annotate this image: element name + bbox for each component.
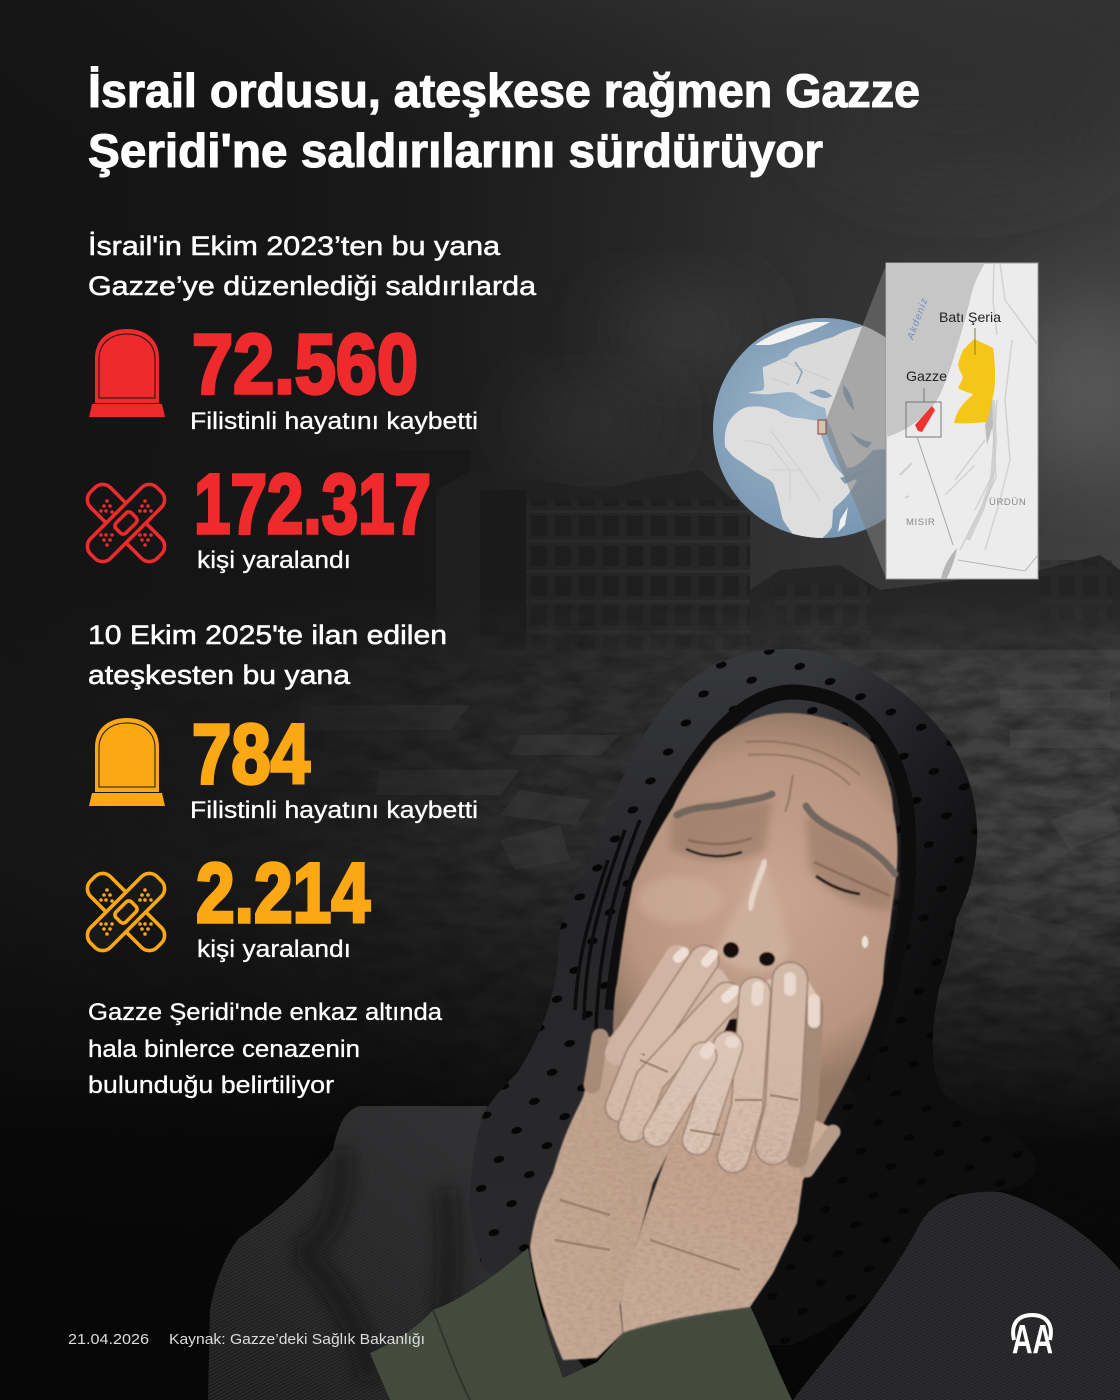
brow right xyxy=(806,806,895,874)
green sleeve xyxy=(370,1248,792,1400)
icon: red bandage xyxy=(83,480,169,566)
note: bodies under rubble: hala binlerce cenazenin xyxy=(88,1036,360,1063)
icon: orange bandage xyxy=(83,869,169,955)
footer: date and source xyxy=(68,1331,425,1348)
note: bodies under rubble xyxy=(88,999,443,1099)
hand wrinkle texture xyxy=(532,1053,802,1360)
stat: 172.317 injured xyxy=(194,457,431,574)
nose xyxy=(716,858,790,971)
section heading: since October 2023: Gazze’ye düzenlediği saldırılarda xyxy=(88,271,537,301)
label: Akdeniz: Akdeniz xyxy=(905,296,931,342)
section heading: since ceasefire xyxy=(88,620,447,690)
stat: 2.214 injured: 2.214 xyxy=(196,846,370,940)
sweater left xyxy=(208,1106,610,1400)
label: Gazze: Gazze xyxy=(906,368,947,384)
photo: grieving woman in a dotted black headscarf xyxy=(208,649,1120,1400)
title: İsrail ordusu, ateşkese rağmen Gazze xyxy=(88,64,920,117)
brow left xyxy=(677,794,772,815)
headscarf xyxy=(470,649,1036,1345)
stat: 172.317 injured: kişi yaralandı xyxy=(197,547,351,574)
map inset: globe with Gaza location xyxy=(713,263,1038,580)
label: Ürdün: ÜRDÜN xyxy=(989,497,1026,508)
note: bodies under rubble: Gazze Şeridi'nde enkaz altında xyxy=(88,999,443,1026)
under-brow shadows xyxy=(670,800,772,861)
marker on globe xyxy=(818,420,826,434)
stat: 172.317 injured: 172.317 xyxy=(194,457,431,551)
icon: red tombstone xyxy=(89,329,165,417)
sea xyxy=(886,263,985,437)
left hand xyxy=(530,952,740,1360)
stat: 2.214 injured: kişi yaralandı xyxy=(197,936,351,963)
globe xyxy=(713,318,886,538)
eye left xyxy=(686,849,742,856)
logo: Anadolu Agency: AA xyxy=(1012,1316,1053,1362)
note: bodies under rubble: bulunduğu belirtiliyor xyxy=(88,1072,334,1099)
fingernails xyxy=(706,978,814,1053)
stat: 784 killed: 784 xyxy=(192,707,310,801)
Gaza box xyxy=(906,402,941,437)
sweater right xyxy=(793,1192,1120,1400)
West Bank xyxy=(954,339,995,423)
eye right xyxy=(816,876,860,894)
right hand xyxy=(620,972,837,1333)
title xyxy=(88,64,920,177)
stat: 784 killed xyxy=(190,707,478,824)
stat: 72.560 killed: 72.560 xyxy=(192,317,418,411)
stat: 72.560 killed: Filistinli hayatını kaybetti xyxy=(190,408,478,435)
section heading: since ceasefire: 10 Ekim 2025'te ilan edilen xyxy=(88,620,447,650)
icon: orange tombstone xyxy=(89,718,165,806)
section heading: since ceasefire: ateşkesten bu yana xyxy=(88,660,351,690)
section heading: since October 2023 xyxy=(88,230,537,301)
projection wedge xyxy=(826,265,886,578)
map panel xyxy=(886,263,1038,580)
stat: 2.214 injured xyxy=(196,846,370,963)
label: Batı Şeria: Batı Şeria xyxy=(939,309,1001,325)
title: Şeridi'ne saldırılarını sürdürüyor xyxy=(88,124,823,177)
label: Mısır: MISIR xyxy=(906,517,935,528)
footer: date and source: Kaynak: Gazze’deki Sağlık Bakanlığı xyxy=(169,1331,425,1348)
stat: 784 killed: Filistinli hayatını kaybetti xyxy=(190,797,478,824)
footer: date and source: 21.04.2026 xyxy=(68,1331,149,1348)
section heading: since October 2023: İsrail'in Ekim 2023’ten bu yana xyxy=(88,230,501,261)
face xyxy=(613,713,898,1125)
logo: Anadolu Agency xyxy=(1012,1315,1053,1362)
